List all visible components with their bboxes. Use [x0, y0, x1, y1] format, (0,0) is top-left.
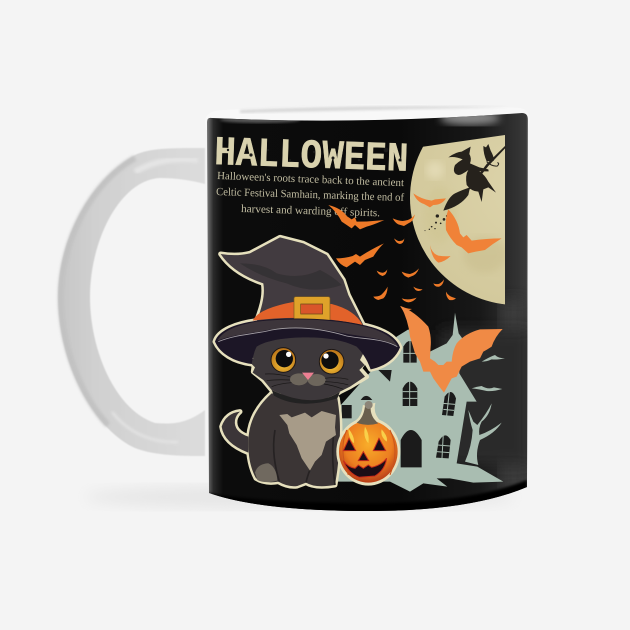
mug body: [205, 104, 530, 515]
intro text: Celtic Festival Samhain, marking the end of: [216, 186, 405, 204]
haunted house: [333, 306, 505, 492]
pumpkin stem: [357, 407, 378, 425]
hat folds: [240, 263, 342, 290]
orange bats: [328, 193, 502, 311]
collar shadow: [272, 390, 340, 404]
brim highlight: [218, 328, 397, 347]
title: HALLOWEEN: [214, 131, 409, 184]
muzzle: [290, 373, 308, 385]
cat with hat: [215, 237, 400, 486]
buckle inner: [301, 304, 323, 314]
hat cone: [221, 237, 363, 325]
dead tree: [465, 403, 502, 465]
buckle: [294, 297, 330, 322]
leg lines: [274, 430, 335, 485]
hat brim: [215, 319, 400, 369]
witch silhouette: [424, 144, 506, 231]
pumpkin highlights: [348, 427, 387, 443]
mug handle: [58, 148, 205, 456]
pumpkin: [336, 401, 400, 486]
rim shade: [240, 106, 510, 113]
window bars: [403, 340, 455, 458]
hat band: [253, 302, 363, 325]
brim top: [217, 319, 397, 346]
pumpkin ribs: [343, 430, 395, 475]
mug shadow: [85, 485, 515, 509]
pumpkin face: [343, 438, 387, 477]
mug glare: [209, 111, 530, 515]
mug black surface: [207, 113, 528, 511]
paw: [255, 463, 277, 482]
intro text: [216, 170, 405, 219]
whiskers: [265, 374, 348, 389]
windows: [342, 341, 456, 467]
pumpkin knob: [365, 401, 373, 409]
intro text: harvest and warding off spirits.: [241, 203, 380, 219]
tail: [222, 412, 248, 453]
head: [249, 332, 365, 400]
eyes: [271, 348, 344, 374]
cat outline: [215, 237, 400, 486]
body: [248, 393, 340, 486]
intro text: Halloween's roots trace back to the ancient: [217, 170, 404, 189]
mug white rim: [205, 104, 530, 130]
nose: [302, 373, 314, 380]
moon: [410, 135, 505, 304]
title distress specks: [227, 148, 402, 162]
wisps: [472, 355, 505, 391]
big bat: [401, 306, 503, 393]
chest fur: [279, 411, 336, 471]
